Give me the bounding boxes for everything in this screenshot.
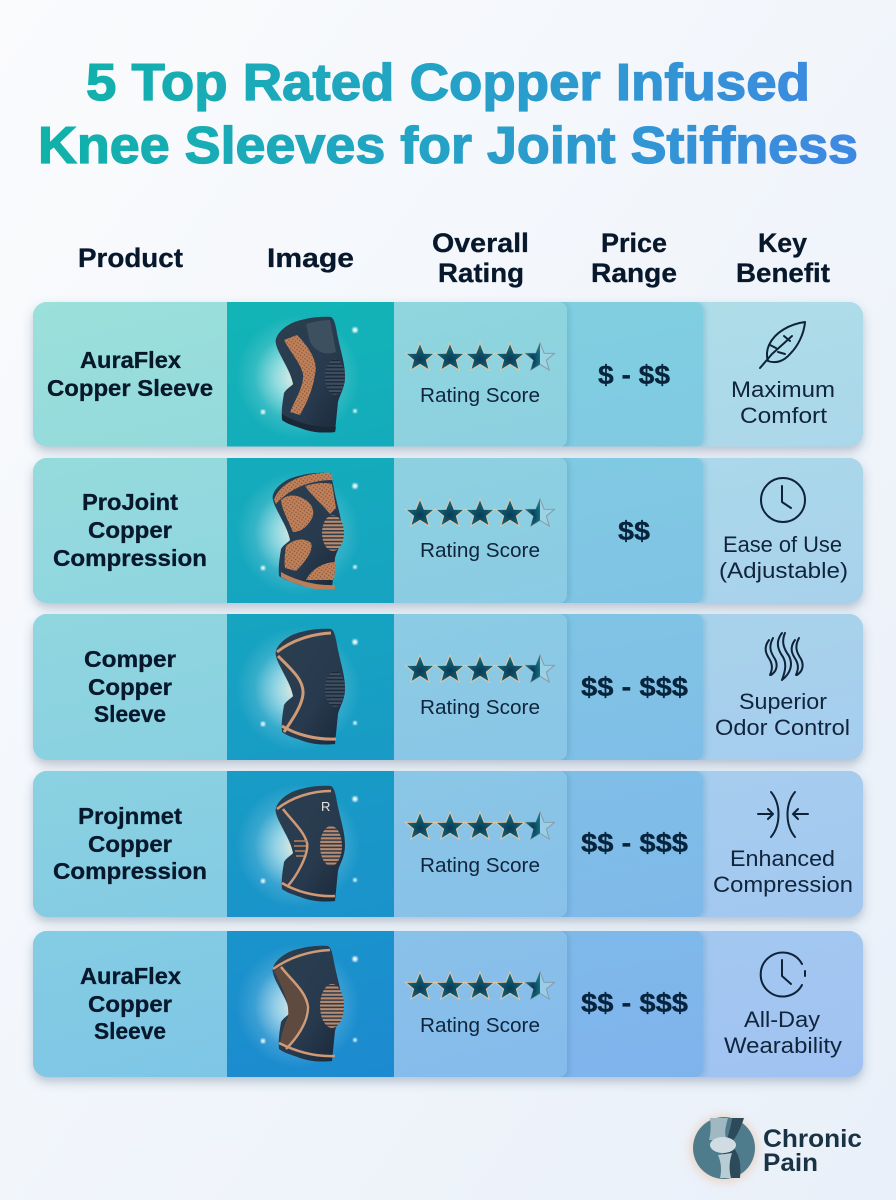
rating stars [406,655,554,682]
image: knee sleeve with R logo [261,786,358,902]
product name [80,963,181,1044]
benefit text: Compression [713,872,853,897]
product name: Compression [53,858,207,884]
row 3: Comper Copper Sleeve [33,614,863,760]
row 2: ProJoint Copper Compression [33,458,863,603]
benefit text: Maximum [731,377,835,402]
table header: Rating [438,258,524,288]
product name: Sleeve [94,701,166,727]
product name: Copper [88,674,172,700]
product name: Copper [88,831,172,857]
price range: $$ - $$$ [581,828,688,858]
product name [84,646,176,727]
rating stars [406,343,554,370]
rating stars [406,499,554,526]
table header: Range [591,258,677,288]
image: knee sleeve with mesh side [261,946,358,1062]
icon: compression arrows [758,792,808,837]
product name: ProJoint [82,489,178,515]
benefit text [713,846,853,897]
table header: Overall [432,228,529,258]
product name: Copper [88,517,172,543]
rating label: Rating Score [420,540,540,562]
image: knee sleeve with copper lines [261,629,358,745]
rating label: Rating Score [420,385,540,407]
title [38,54,858,175]
benefit text: Enhanced [730,846,835,871]
title: Knee Sleeves for Joint Stiffness [38,117,858,175]
rating stars [406,972,554,999]
icon: odor waves [766,633,803,680]
logo: Chronic Pain [691,1116,862,1182]
benefit text: (Adjustable) [719,558,848,583]
logo wordmark: Pain [763,1149,818,1177]
table header: Price [601,228,667,258]
product name: Compression [53,545,207,571]
benefit text: Odor Control [715,715,850,740]
product name [53,489,207,571]
product name: AuraFlex [80,963,181,989]
benefit text [731,377,835,428]
benefit text: All-Day [744,1007,820,1032]
price range: $$ [618,516,650,546]
benefit text [715,689,850,740]
table header: Product [78,243,183,273]
price range: $$ - $$$ [581,988,688,1018]
benefit text [719,532,848,583]
rating stars [406,812,554,839]
table header: Key [758,228,807,258]
table header: Benefit [736,258,830,288]
product name: Copper Sleeve [47,375,213,401]
table header: Image [267,243,354,273]
product name: Sleeve [94,1018,166,1044]
title: 5 Top Rated Copper Infused [86,54,810,112]
product name [53,803,207,884]
benefit text: Superior [739,689,827,714]
row 4: Projnmet Copper Compression [33,771,863,917]
benefit text: Wearability [724,1033,842,1058]
sleeve brand mark: R [321,799,330,814]
rating label: Rating Score [420,1015,540,1037]
row 5: AuraFlex Copper Sleeve [33,931,863,1077]
rating label: Rating Score [420,855,540,877]
image: knee sleeve with copper patches [261,473,358,590]
benefit text [724,1007,842,1058]
product name: Copper [88,991,172,1017]
price range: $$ - $$$ [581,672,688,702]
benefit text: Comfort [740,403,827,428]
product name [47,347,213,401]
product name: Comper [84,646,176,672]
icon: broken-ring clock [761,952,805,997]
benefit text: Ease of Use [723,532,842,557]
product name: AuraFlex [80,347,181,373]
icon: clock [761,478,805,522]
rating label: Rating Score [420,697,540,719]
image: knee sleeve with copper band [261,317,358,433]
logo wordmark: Chronic [763,1125,862,1153]
price range: $ - $$ [598,360,670,390]
icon: feather [760,322,805,368]
logo wordmark [763,1125,862,1177]
table header [78,228,830,288]
product name: Projnmet [78,803,182,829]
row 1: AuraFlex Copper Sleeve [33,302,863,447]
